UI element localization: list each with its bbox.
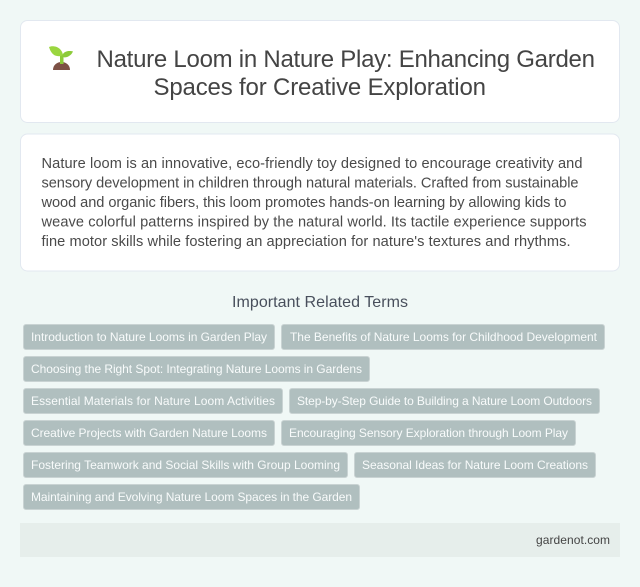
tag: Seasonal Ideas for Nature Loom Creations: [362, 458, 588, 472]
tag: [24, 356, 370, 382]
tag: Maintaining and Evolving Nature Loom Spaces in the Garden: [31, 490, 352, 504]
title text: Nature Loom in Nature Play: Enhancing Garden: [96, 46, 595, 73]
panel: description: weave colorful patterns inspired by the natural world. Its tactile experience supports: [40, 214, 586, 230]
panel: description: Nature loom is an innovative, eco-friendly toy designed to encourage creativity and: [42, 156, 582, 172]
panel: title card: [20, 20, 620, 122]
panel: description: [20, 134, 620, 271]
tag: [290, 388, 600, 414]
panel: related term tags: [24, 324, 604, 510]
tag: Fostering Teamwork and Social Skills with Group Looming: [31, 458, 340, 472]
tag: [282, 324, 604, 350]
panel: description: sensory development in children through natural materials. Crafted from sustainable: [42, 176, 578, 192]
title text: Spaces for Creative Exploration: [154, 74, 486, 101]
panel: description: fine motor skills while fostering an appreciation for nature's textures and rhythms.: [42, 234, 570, 250]
heading: important related terms: Important Related Terms: [232, 294, 408, 311]
tag: [24, 484, 360, 510]
tag: [354, 452, 596, 478]
tag: [24, 324, 274, 350]
panel: description: wood and organic fibers, this loom promotes hands-on learning by allowing kids to: [40, 195, 566, 211]
tag: Encouraging Sensory Exploration through Loom Play: [289, 426, 568, 440]
title text: [96, 46, 595, 101]
tag: Essential Materials for Nature Loom Activities: [31, 394, 275, 408]
tag: Step-by-Step Guide to Building a Nature Loom Outdoors: [297, 394, 592, 408]
tag: Creative Projects with Garden Nature Looms: [31, 426, 267, 440]
tag: Introduction to Nature Looms in Garden Play: [31, 330, 267, 344]
tag: [24, 420, 274, 446]
icon: sprout: [49, 46, 73, 70]
tag: The Benefits of Nature Looms for Childhood Development: [290, 330, 598, 344]
tag: [24, 388, 282, 414]
tag: [282, 420, 576, 446]
tag: [24, 452, 348, 478]
footer: [20, 523, 620, 557]
tag: Choosing the Right Spot: Integrating Nature Looms in Gardens: [31, 362, 362, 376]
footer: gardenot.com: [536, 533, 610, 547]
